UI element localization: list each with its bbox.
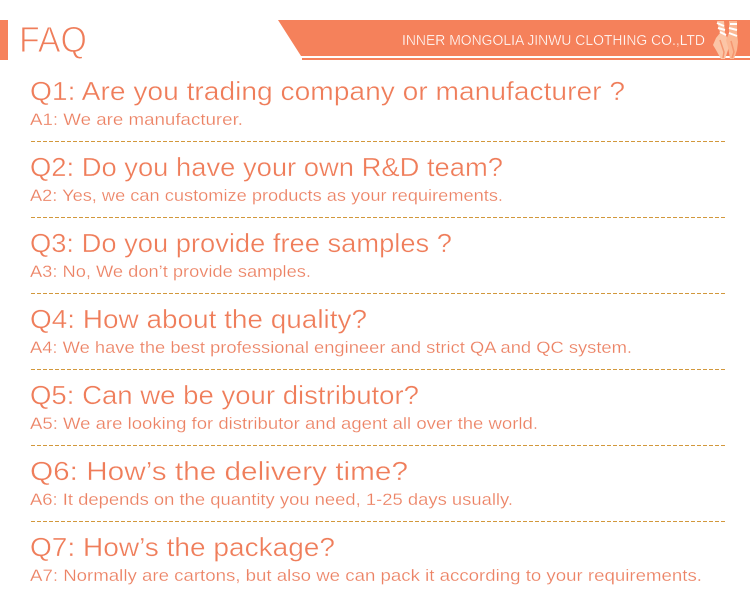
header accent bar (0, 20, 8, 60)
answer 3: A3: No, We don’t provide samples. (30, 262, 311, 281)
faq 1 (30, 76, 625, 129)
faq 6 (30, 456, 513, 509)
question 1: Q1: Are you trading company or manufacturer ? (30, 76, 625, 106)
faq 3 (30, 228, 452, 281)
company name: INNER MONGOLIA JINWU CLOTHING CO.,LTD (402, 32, 705, 49)
answer 1: A1: We are manufacturer. (30, 110, 243, 129)
faq 7 (30, 532, 702, 585)
question 2: Q2: Do you have your own R&D team? (30, 152, 503, 182)
question 5: Q5: Can we be your distributor? (30, 380, 419, 410)
answer 6: A6: It depends on the quantity you need, 1-25 days usually. (30, 490, 513, 509)
question 7: Q7: How’s the package? (30, 532, 335, 562)
company banner (278, 20, 750, 60)
question 3: Q3: Do you provide free samples ? (30, 228, 452, 258)
faq 2 (30, 152, 503, 205)
answer 4: A4: We have the best professional engineer and strict QA and QC system. (30, 338, 632, 357)
answer 5: A5: We are looking for distributor and agent all over the world. (30, 414, 538, 433)
icon: ballet shoes (713, 21, 738, 59)
answer 2: A2: Yes, we can customize products as your requirements. (30, 186, 503, 205)
faq 4 (30, 304, 632, 357)
question 6: Q6: How’s the delivery time? (30, 456, 408, 486)
answer 7: A7: Normally are cartons, but also we can pack it according to your requirements. (30, 566, 702, 585)
question 4: Q4: How about the quality? (30, 304, 367, 334)
faq 5 (30, 380, 538, 433)
title: FAQ: FAQ (19, 19, 87, 60)
